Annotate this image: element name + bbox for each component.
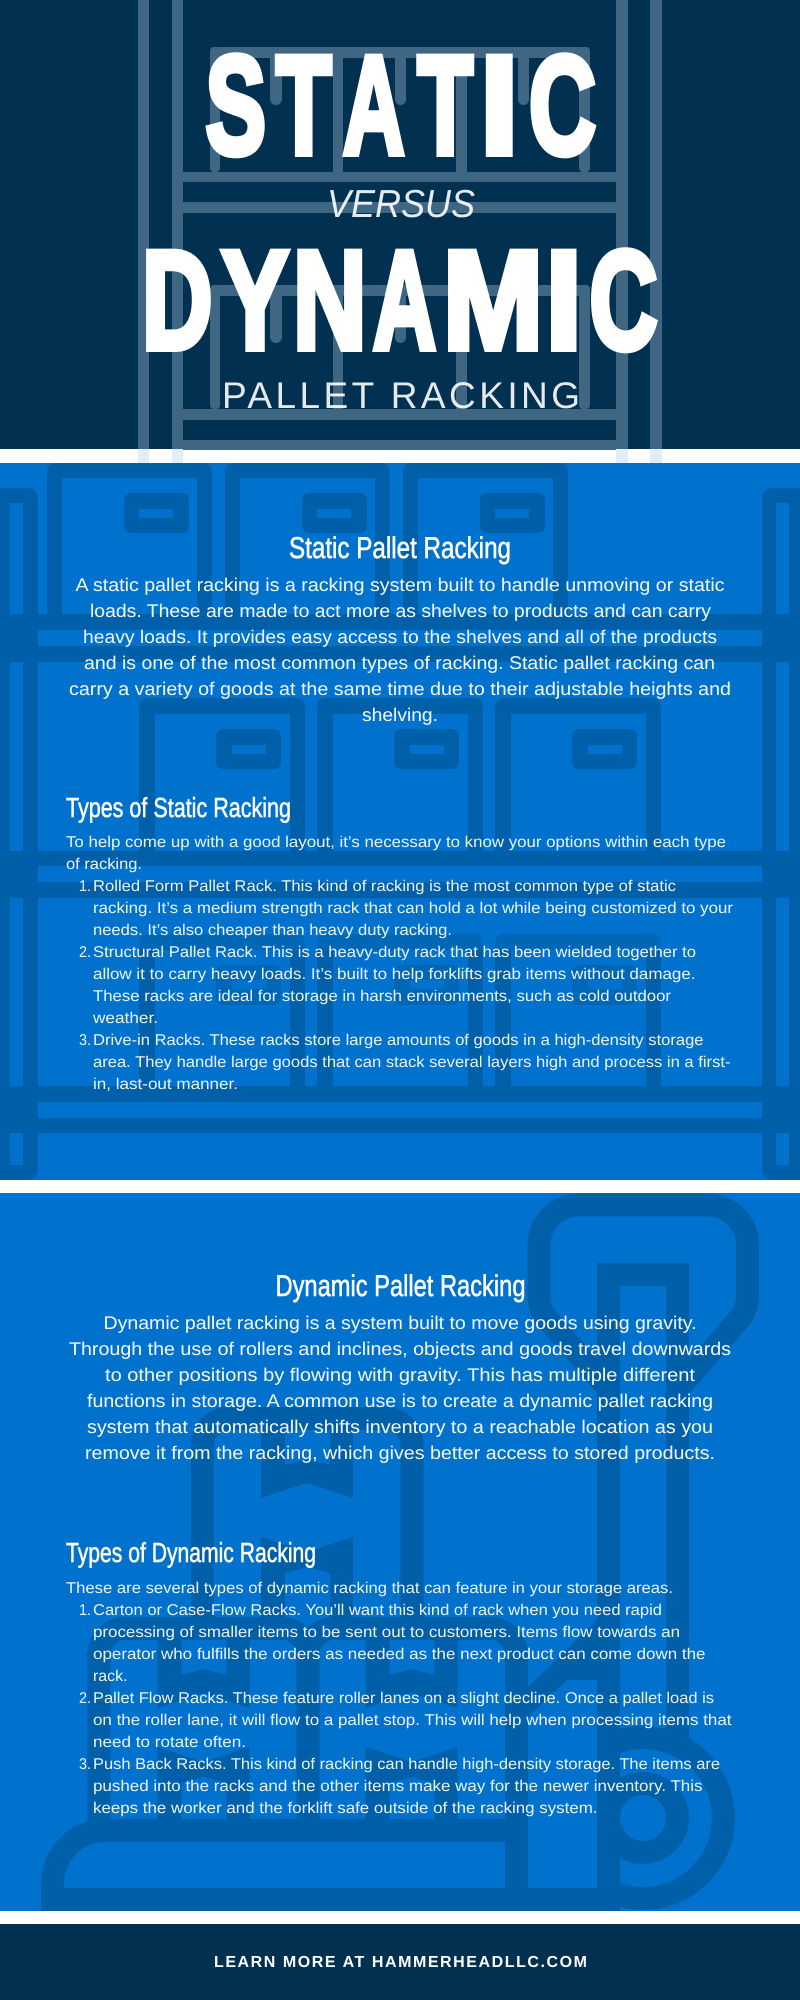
title: static: I: [480, 26, 518, 184]
text: static racking list: These racks are ideal for storage in harsh environments, such as cold outdoor: [93, 988, 671, 1005]
text: static racking list: Rolled Form Pallet Rack. This kind of racking is the most common type of static: [93, 878, 676, 895]
title: dynamic: C: [590, 222, 658, 378]
text: dynamic racking list: need to rotate often.: [93, 1734, 246, 1751]
title: static: S: [206, 26, 266, 184]
text: dynamic racking list: 2.: [79, 1690, 91, 1707]
text: dynamic intro: system that automatically shifts inventory to a reachable location as you: [87, 1416, 713, 1437]
icon: faded lower boxes: [139, 934, 661, 1005]
text: static racking list: needs. It’s also cheaper than heavy duty racking.: [93, 922, 452, 939]
icon: rack outline in header: [138, 0, 662, 450]
text: static racking list: 3.: [79, 1032, 91, 1049]
title: dynamic: Y: [222, 222, 288, 378]
text: static intro: shelving.: [362, 704, 438, 725]
text: static intro: and is one of the most common types of racking. Static pallet racking can: [84, 652, 715, 673]
title: static: A: [343, 26, 404, 184]
text: static racking list: in, last-out manner.: [93, 1076, 238, 1093]
panel: header: [0, 0, 800, 463]
heading: types of static racking: Types of Static Racking: [66, 792, 291, 823]
text: dynamic racking list: Push Back Racks. This kind of racking can handle high-density storage. The items are: [93, 1756, 720, 1773]
text: static racking list: of racking.: [66, 856, 142, 873]
text: dynamic racking list: operator who fulfills the orders as needed as the next product can come down the: [93, 1646, 706, 1663]
text: dynamic racking list: [66, 1580, 732, 1817]
icon: hand truck with boxes background: [52, 1205, 748, 1925]
icon: static rack background: [0, 463, 800, 1180]
text: dynamic intro: functions in storage. A common use is to create a dynamic pallet racking: [87, 1390, 713, 1411]
title: dynamic: A: [373, 222, 436, 378]
panel: static pallet racking: [0, 463, 800, 1180]
text: static racking list: weather.: [92, 1010, 158, 1027]
title: static: T: [276, 26, 332, 184]
text: static racking list: 1.: [79, 878, 91, 895]
text: static racking list: area. They handle large goods that can stack several layers high and process in a first-: [93, 1054, 730, 1071]
title: dynamic: N: [293, 222, 366, 378]
text: static racking list: allow it to carry heavy loads. It’s built to help forklifts grab items without damage.: [93, 966, 696, 983]
text: dynamic racking list: 1.: [79, 1602, 91, 1619]
text: static intro: A static pallet racking is a racking system built to handle unmoving or static: [76, 574, 724, 595]
text: dynamic intro: to other positions by flowing with gravity. This has multiple different: [105, 1364, 695, 1385]
text: static racking list: [66, 834, 733, 1093]
text: static intro: carry a variety of goods at the same time due to their adjustable heights and: [69, 678, 731, 699]
panel: dynamic pallet racking: [0, 1193, 800, 1925]
text: dynamic racking list: processing of smaller items to be sent out to customers. Items flow towards an: [93, 1624, 680, 1641]
text: static intro: [69, 574, 731, 725]
text: dynamic racking list: pushed into the racks and the other items make way for the newer inventory. This: [93, 1778, 703, 1795]
text: static racking list: Drive-in Racks. These racks store large amounts of goods in a high-density storage: [93, 1032, 703, 1049]
text: dynamic intro: Through the use of rollers and inclines, objects and goods travel downwards: [69, 1338, 731, 1359]
text: dynamic intro: [69, 1312, 731, 1463]
text: dynamic racking list: Pallet Flow Racks. These feature roller lanes on a slight decline. Once a pallet load is: [93, 1690, 714, 1707]
text: dynamic racking list: on the roller lane, it will flow to a pallet stop. This will help when processing items that: [93, 1712, 732, 1729]
text: footer call to action: LEARN MORE AT HAMMERHEADLLC.COM: [214, 1954, 587, 1971]
panel: footer: [0, 1924, 800, 2000]
heading: static pallet racking: Static Pallet Racking: [289, 532, 511, 565]
text: dynamic racking list: keeps the worker and the forklift safe outside of the racking system.: [93, 1800, 598, 1817]
title: static: C: [529, 26, 596, 184]
text: dynamic racking list: rack.: [93, 1668, 128, 1685]
title: dynamic: I: [546, 222, 582, 378]
text: static intro: heavy loads. It provides easy access to the shelves and all of the products: [83, 626, 717, 647]
text: static racking list: Structural Pallet Rack. This is a heavy-duty rack that has been wielded together to: [93, 944, 696, 961]
text: static racking list: racking. It’s a medium strength rack that can hold a lot while being customized to your: [93, 900, 733, 917]
text: dynamic racking list: These are several types of dynamic racking that can feature in your storage areas.: [66, 1580, 673, 1597]
title: pallet racking: PALLET RACKING: [222, 375, 580, 416]
text: dynamic intro: remove it from the racking, which gives better access to stored products.: [85, 1442, 715, 1463]
text: dynamic racking list: Carton or Case-Flow Racks. You’ll want this kind of rack when you need rapid: [93, 1602, 662, 1619]
text: static racking list: 2.: [79, 944, 91, 961]
text: dynamic intro: Dynamic pallet racking is a system built to move goods using gravity.: [104, 1312, 696, 1333]
heading: dynamic pallet racking: Dynamic Pallet Racking: [276, 1270, 526, 1303]
heading: types of dynamic racking: Types of Dynamic Racking: [66, 1537, 316, 1568]
title: dynamic: D: [142, 222, 212, 378]
title: static: T: [418, 26, 473, 184]
title: versus: VERSUS: [327, 183, 475, 226]
title: dynamic: M: [443, 222, 543, 378]
text: static intro: loads. These are made to act more as shelves to products and can carry: [90, 600, 712, 621]
text: static racking list: To help come up with a good layout, it’s necessary to know your options within each type: [66, 834, 726, 851]
text: dynamic racking list: 3.: [79, 1756, 91, 1773]
